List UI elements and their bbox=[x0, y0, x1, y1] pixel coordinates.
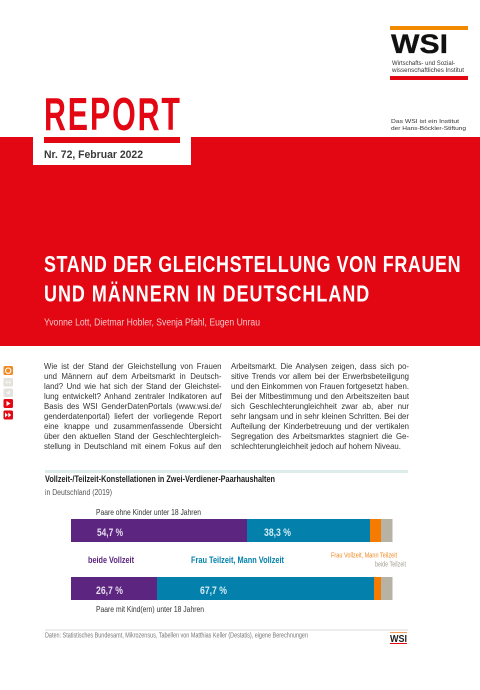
logo: WSI: WSI bbox=[391, 29, 448, 59]
bar: couples with children: 67,7 % bbox=[200, 585, 227, 597]
logo: small WSI: WSI bbox=[390, 634, 407, 645]
text block: intro right column bbox=[231, 362, 409, 451]
text block: intro left column: eine knappe und zusammenfassende Übersicht bbox=[44, 422, 222, 431]
legend: Frau Vollzeit, Mann Teilzeit bbox=[331, 552, 397, 560]
heading: REPORT: REPORT bbox=[44, 90, 180, 141]
bar: couples without children bbox=[71, 519, 392, 542]
text block: intro right column: sich Geschlechterungleichheit zwar ab, aber nur bbox=[231, 402, 409, 411]
legend bbox=[88, 552, 406, 568]
text block: intro left column: und Männern auf dem Arbeitsmarkt in Deutsch- bbox=[44, 372, 222, 381]
title: STAND DER GLEICHSTELLUNG VON FRAUEN bbox=[44, 252, 461, 278]
text block: intro right column: Arbeitsmarkt. Die Analysen zeigen, dass sich po- bbox=[231, 362, 409, 371]
icons: navigation buttons bbox=[4, 366, 13, 420]
text block: intro right column: und den Einkommen von Frauen fortgesetzt haben. bbox=[231, 382, 409, 391]
text block: intro right column: Segregation des Arbeitsmarktes stagniert die Ge- bbox=[231, 432, 409, 441]
text block: intro right column: schlechterungleichheit jedoch auf hohem Niveau. bbox=[231, 442, 401, 451]
text block: intro left column: stellung in Deutschland mit einem Fokus auf den bbox=[44, 442, 222, 451]
logo: WSI: Wirtschafts- und Sozial- bbox=[392, 61, 455, 67]
text block: intro left column: Wie ist der Stand der Gleichstellung von Frauen bbox=[44, 362, 222, 371]
bar: couples with children: 26,7 % bbox=[96, 585, 123, 597]
icon: first page bbox=[4, 378, 13, 386]
chart title: in Deutschland (2019) bbox=[45, 488, 112, 497]
legend: beide Vollzeit bbox=[88, 555, 134, 565]
text block: intro right column: Aufteilung der Kinderbetreuung und der vertikalen bbox=[231, 422, 409, 431]
text block: intro left column: über den aktuellen Stand der Geschlechtergleich- bbox=[44, 432, 222, 441]
logo: WSI bbox=[390, 26, 468, 80]
chart title bbox=[45, 470, 408, 497]
chart title: Vollzeit-/Teilzeit-Konstellationen in Zwei-Verdiener-Paarhaushalten bbox=[45, 474, 275, 485]
text block: intro left column bbox=[44, 362, 222, 451]
bar: couples without children: 54,7 % bbox=[97, 527, 123, 539]
text block: intro right column: sitive Trends vor allem bei der Erwerbsbeteiligung bbox=[231, 372, 409, 381]
label: couples with children: Paare mit Kind(ern) unter 18 Jahren bbox=[96, 604, 204, 614]
logo: WSI: wissenschaftliches Institut bbox=[391, 68, 464, 74]
text block: intro right column: sehr langsam und in sehr kleinen Schritten. Bei der bbox=[231, 412, 409, 421]
text: institute note: Das WSI ist ein Institut bbox=[391, 119, 459, 125]
text block: intro right column: Bei der Mitbestimmung und den Arbeitszeiten baut bbox=[231, 392, 409, 401]
panel: white report tab bbox=[33, 137, 191, 165]
title bbox=[44, 252, 461, 307]
text: institute note: der Hans-Böckler-Stiftung bbox=[391, 126, 466, 132]
text: institute note bbox=[391, 119, 466, 132]
legend: beide Teilzeit bbox=[375, 562, 406, 568]
text: authors: Yvonne Lott, Dietmar Hobler, Svenja Pfahl, Eugen Unrau bbox=[44, 318, 260, 328]
icon: last page bbox=[4, 410, 13, 420]
text block: intro left column: land? Und wie hat sich der Stand der Gleichstel- bbox=[44, 382, 222, 391]
text: issue number: Nr. 72, Februar 2022 bbox=[44, 149, 143, 161]
text block: intro left column: lung entwickelt? Anhand zentraler Indikatoren auf bbox=[44, 392, 222, 401]
title: UND MÄNNERN IN DEUTSCHLAND bbox=[44, 281, 369, 307]
icon: back to start bbox=[4, 366, 13, 375]
icon: previous page bbox=[4, 388, 13, 397]
text block: intro left column: Basis des WSI GenderDatenPortals (www.wsi.de/ bbox=[44, 402, 222, 411]
text block: intro left column: genderdatenportal) liefert der vorliegende Report bbox=[44, 412, 222, 421]
source note: Daten: Statistisches Bundesamt, Mikrozensus, Tabellen von Matthias Keller (Destatis), eigene Berechnungen bbox=[45, 632, 308, 640]
label: couples without children: Paare ohne Kinder unter 18 Jahren bbox=[96, 507, 201, 517]
panel: red cover band bbox=[0, 137, 480, 346]
legend: Frau Teilzeit, Mann Vollzeit bbox=[191, 555, 284, 565]
bar: couples with children bbox=[71, 577, 392, 600]
bar: couples without children: 38,3 % bbox=[264, 527, 291, 539]
icon: next page bbox=[4, 399, 13, 408]
